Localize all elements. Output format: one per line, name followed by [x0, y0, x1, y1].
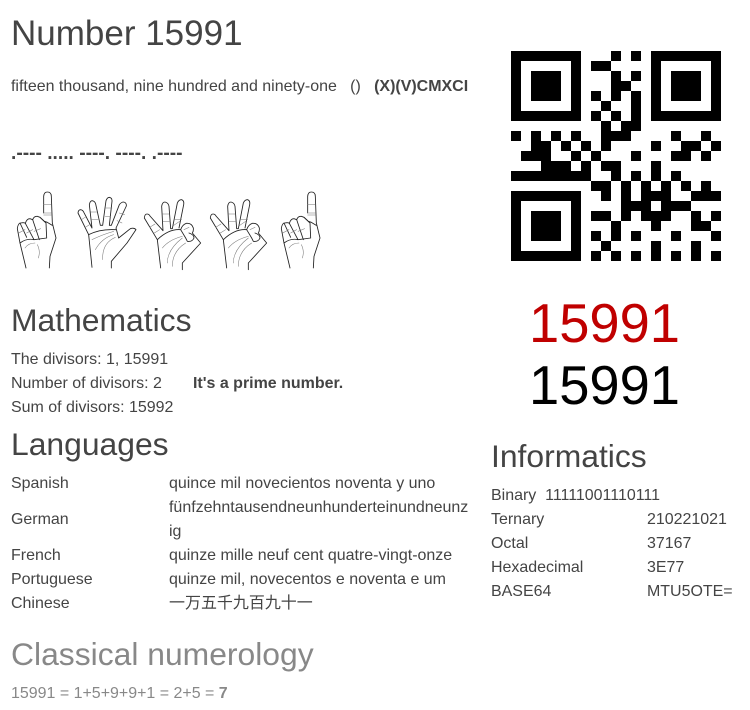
table: languages [11, 475, 468, 612]
heading: languages: Languages [11, 426, 169, 462]
table: languages: French [11, 547, 61, 564]
number of divisors: Number of divisors: 2 [11, 375, 162, 392]
icon: sign language hands [16, 192, 320, 270]
table: informatics: Octal [491, 535, 528, 552]
sum of divisors: Sum of divisors: 15992 [11, 399, 173, 416]
table: languages: German [11, 511, 69, 528]
hand: one [281, 192, 320, 268]
text block: divisors [11, 351, 343, 416]
divisors list: The divisors: 1, 15991 [11, 351, 168, 368]
big number black: 15991 [529, 355, 680, 416]
numerology calculation: 15991 = 1+5+9+9+1 = 2+5 = 7 [11, 685, 228, 702]
table: informatics: 3E77 [647, 559, 684, 576]
title: Number 15991 [11, 14, 243, 53]
QR code [511, 51, 721, 261]
table: languages: Portuguese [11, 571, 93, 588]
heading: mathematics: Mathematics [11, 302, 192, 338]
hand: three [144, 200, 201, 270]
table: informatics [491, 487, 733, 600]
table: languages: 一万五千九百九十一 [169, 595, 313, 612]
table: informatics: Hexadecimal [491, 559, 583, 576]
hand: three [210, 200, 267, 270]
table: informatics: BASE64 [491, 583, 551, 600]
table: informatics: MTU5OTE= [647, 583, 733, 600]
table: languages: fünfzehntausendneunhunderteinundneunz [169, 499, 468, 516]
table: informatics: 210221021 [647, 511, 727, 528]
prime note: It's a prime number. [193, 375, 343, 392]
table: informatics: 37167 [647, 535, 691, 552]
morse code: .---- ..... ----. ----. .---- [11, 143, 183, 164]
heading: informatics: Informatics [491, 438, 647, 474]
hand: five [78, 197, 136, 268]
table: informatics: Ternary [491, 511, 544, 528]
heading: classical numerology: Classical numerology [11, 636, 314, 672]
number in words and roman numeral: fifteen thousand, nine hundred and ninety-one () (X)(V)CMXCI [11, 78, 468, 95]
table: informatics: Binary 11111001110111 [491, 487, 660, 504]
table: languages: ig [169, 523, 181, 540]
table: languages: Spanish [11, 475, 69, 492]
table: languages: quinze mil, novecentos e noventa e um [169, 571, 446, 588]
big number red: 15991 [529, 293, 680, 354]
table: languages: Chinese [11, 595, 70, 612]
hand: one [17, 192, 56, 268]
table: languages: quince mil novecientos noventa y uno [169, 475, 435, 492]
table: languages: quinze mille neuf cent quatre-vingt-onze [169, 547, 452, 564]
